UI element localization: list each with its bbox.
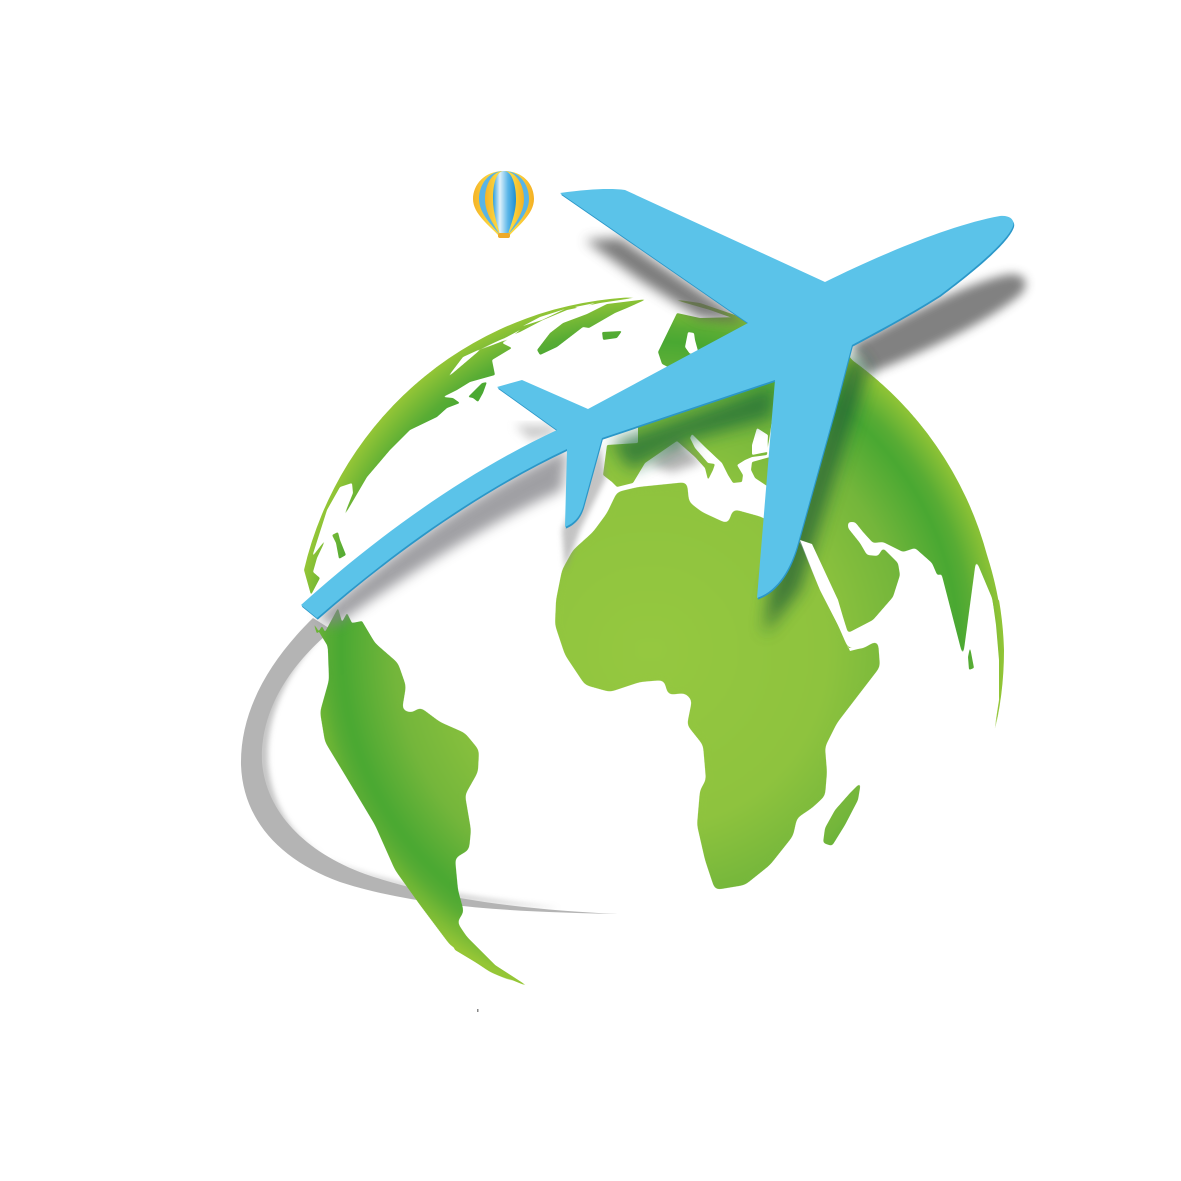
shadow: lower wing: [764, 350, 868, 635]
white streaks in arctic band: [505, 303, 595, 338]
orbit swoosh: [241, 618, 618, 914]
shadow: nose: [852, 274, 1026, 374]
swoosh body: [241, 618, 618, 914]
region: Turkey and Caucasus: [751, 457, 770, 488]
continent: Scandinavia: [658, 313, 752, 367]
shadow: tail fin: [562, 445, 606, 572]
continent: Asia eastern sliver: [992, 596, 1004, 738]
island: Sri Lanka: [968, 647, 974, 670]
airplane body: [301, 189, 1013, 618]
shadow: Mediterranean grey: [650, 438, 702, 472]
swoosh soft inner edge: [258, 622, 560, 908]
continent: Greenland: [537, 299, 647, 355]
continent: Asia and Arabia: [790, 350, 1002, 657]
shadow: tail: [317, 449, 567, 626]
white gap in red sea: [800, 540, 862, 651]
shadow: fuselage over Europe: [612, 385, 775, 470]
continent: South America north coast: [313, 608, 378, 680]
balloon centre stripe: [493, 171, 516, 235]
airplane edge shading: [302, 191, 1014, 620]
shadow: upper wing: [585, 238, 748, 323]
icon: hot air balloon: [473, 171, 534, 238]
continent: North America arc: [304, 297, 640, 595]
continent: South America southern tip: [440, 920, 529, 987]
continent: Europe and Middle East: [603, 372, 782, 487]
island: Iceland: [602, 331, 622, 340]
island: Caribbean: [332, 532, 346, 559]
shadow: above tail: [515, 425, 555, 440]
continent: Africa: [555, 482, 880, 890]
globe continents: [304, 297, 1004, 992]
airplane: [301, 189, 1014, 620]
balloon outer blue stripes: [479, 171, 529, 235]
continent: South America body: [320, 622, 535, 992]
balloon inner yellow stripes: [485, 171, 524, 235]
region: Arctic strand above Scandinavia: [672, 299, 750, 325]
balloon yellow envelope: [473, 171, 534, 236]
island: Madagascar: [823, 782, 861, 846]
small speck: [477, 1009, 478, 1012]
plane shadows: [317, 238, 1026, 635]
island: Newfoundland: [468, 382, 487, 402]
balloon basket: [498, 233, 510, 238]
